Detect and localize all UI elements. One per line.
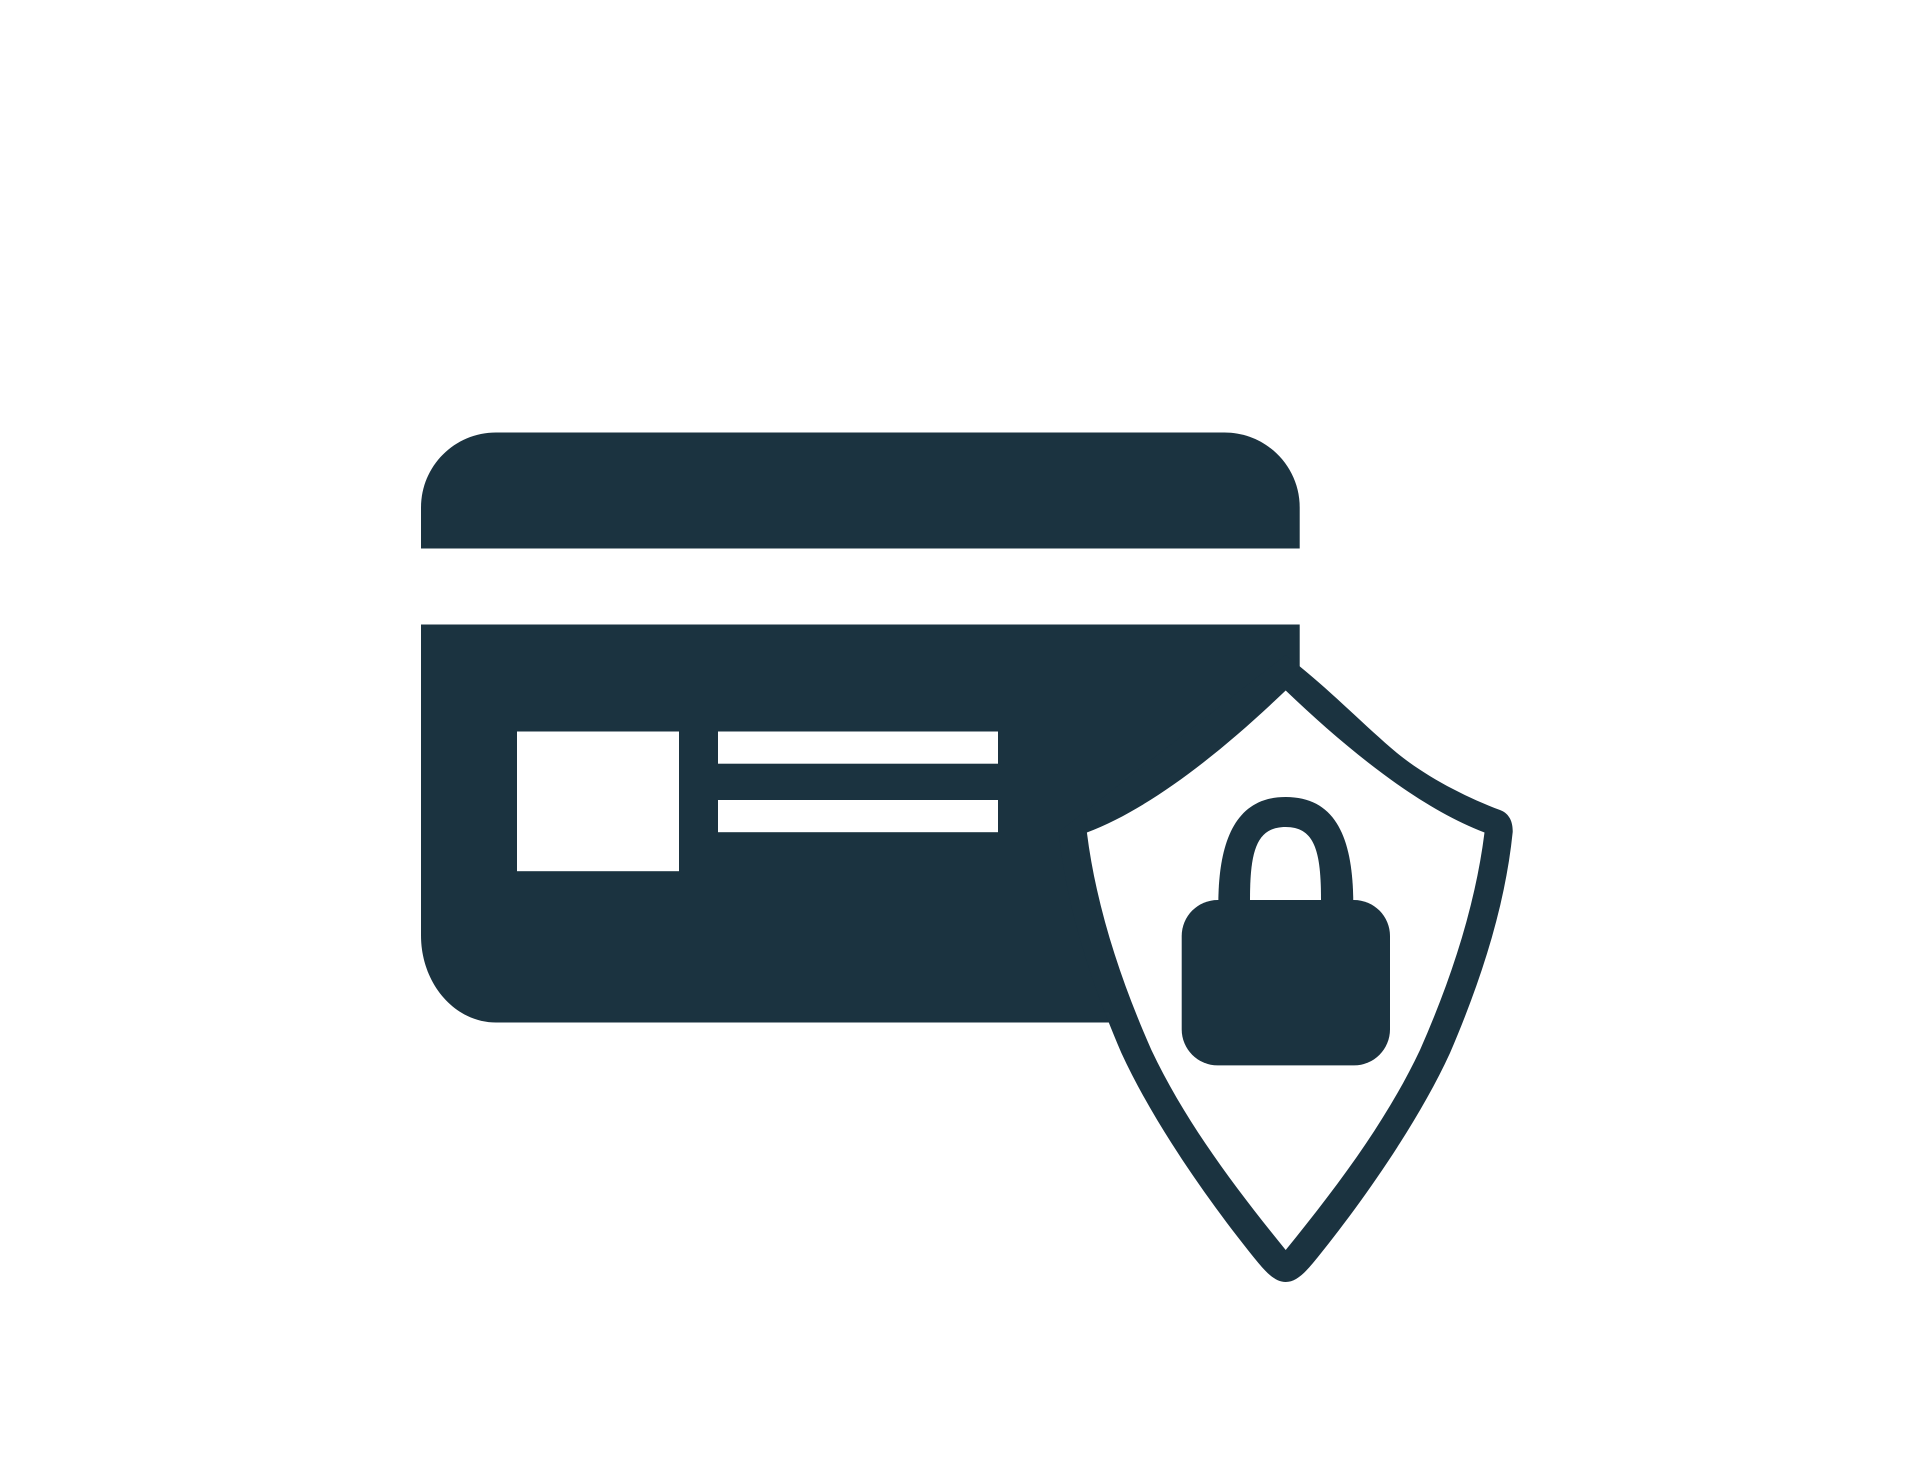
card text line 2 bbox=[718, 800, 998, 832]
card text line 1 bbox=[718, 732, 998, 764]
icon: security shield bbox=[1059, 655, 1513, 1282]
icon: credit card bbox=[421, 432, 1300, 1022]
padlock body bbox=[1182, 900, 1390, 1065]
icon: padlock bbox=[1182, 797, 1390, 1065]
card chip bbox=[517, 732, 679, 871]
card lower body bbox=[421, 624, 1300, 1022]
shield outline bbox=[1059, 655, 1513, 1282]
card top band bbox=[421, 432, 1300, 548]
shield inner face bbox=[1087, 690, 1484, 1250]
padlock shackle bbox=[1218, 797, 1353, 905]
padlock shackle opening bbox=[1250, 827, 1321, 900]
